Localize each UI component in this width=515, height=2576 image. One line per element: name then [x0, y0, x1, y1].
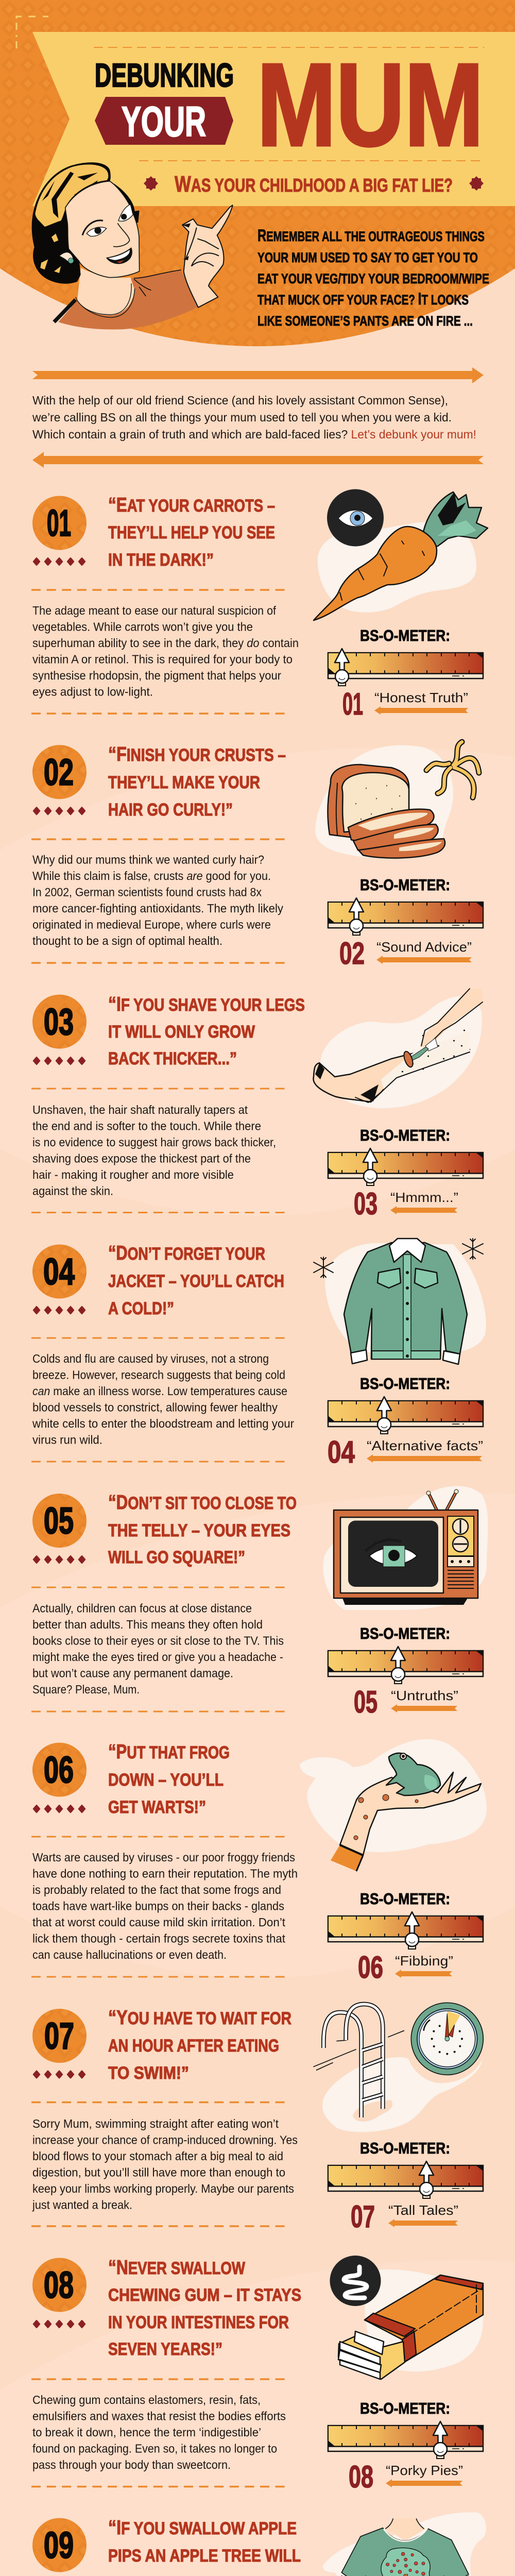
body text: hair - making it rougher and more visible — [32, 1168, 234, 1181]
rating 04: 04 — [328, 1435, 355, 1469]
number badge 07: 07 — [44, 2015, 74, 2057]
rating 07 — [351, 2199, 458, 2234]
body text: can make an illness worse. Low temperatures cause — [32, 1384, 287, 1398]
background lighter bands — [0, 748, 515, 2576]
heading: “YOU HAVE TO WAIT FOR — [108, 2007, 291, 2029]
BS meter 06 — [328, 1890, 484, 1949]
diamonds — [33, 1306, 85, 1315]
heading: HAIR GO CURLY!” — [108, 800, 233, 820]
number badge 03 — [32, 994, 87, 1049]
BS meter 06: BS-O-METER: — [360, 1890, 450, 1908]
heading: THE TELLY – YOUR EYES — [108, 1521, 290, 1540]
body text: originated in medieval Europe, where curls were — [32, 918, 271, 931]
heading: CHEWING GUM – IT STAYS — [108, 2285, 301, 2305]
number badge 03: 03 — [44, 1002, 74, 1043]
intro text: we’re calling BS on all the things your mum used to tell you when you were a kid. — [32, 411, 452, 424]
number badge 04: 04 — [43, 1251, 75, 1293]
body text: to break it down, hence the term ‘indigestible’ — [32, 2426, 261, 2439]
body text: pass through your body than sweetcorn. — [32, 2458, 231, 2471]
body text: better than adults. This means they often hold — [32, 1618, 263, 1631]
rating 05: “Untruths” — [391, 1688, 458, 1703]
heading: “FINISH YOUR CRUSTS – — [108, 743, 286, 766]
number badge 02: 02 — [44, 752, 74, 793]
body text — [31, 1089, 285, 1213]
rating 07: 07 — [351, 2199, 375, 2234]
rating 08 — [349, 2460, 463, 2494]
rating 02: 02 — [339, 936, 365, 971]
title: your plaque: YOUR — [122, 98, 206, 145]
body text: is no evidence to suggest hair grows back thicker, — [32, 1136, 276, 1149]
illustration: pool ladder and clock — [313, 2003, 483, 2132]
body text: While this claim is false, crusts are good for you. — [32, 869, 271, 883]
heading — [108, 993, 305, 1069]
heading: IT WILL ONLY GROW — [108, 1022, 255, 1042]
body text: books close to their eyes or sit close to the TV. This — [32, 1634, 284, 1648]
body text — [31, 1587, 285, 1711]
heading — [108, 1242, 284, 1318]
body text — [31, 1837, 298, 1977]
number badge 01 — [32, 496, 87, 550]
corner dashes top left — [16, 16, 48, 48]
body text: synthesise rhodopsin, the pigment that helps your — [32, 669, 281, 682]
body text: Square? Please, Mum. — [32, 1683, 140, 1696]
heading — [108, 2517, 301, 2576]
rating 01 — [342, 687, 468, 721]
rating 04: “Alternative facts” — [367, 1438, 483, 1453]
rating 02 — [339, 936, 472, 971]
rating 02: “Sound Advice” — [376, 939, 472, 955]
body text — [31, 2379, 286, 2486]
body text — [31, 839, 285, 963]
intro text: With the help of our old friend Science (and his lovely assistant Common Sense), — [32, 394, 448, 407]
heading: IN THE DARK!” — [108, 550, 214, 570]
intro heading text: THAT MUCK OFF YOUR FACE? IT LOOKS — [258, 290, 469, 308]
rating 07: “Tall Tales” — [388, 2202, 458, 2218]
diamonds — [33, 1555, 85, 1564]
heading: IN YOUR INTESTINES FOR — [108, 2313, 289, 2332]
body text: breeze. However, research suggests that being cold — [32, 1368, 285, 1382]
heading — [108, 2257, 301, 2359]
heading: SEVEN YEARS!” — [108, 2340, 222, 2359]
diamonds — [33, 807, 85, 815]
heading — [108, 2007, 291, 2083]
heading: WILL GO SQUARE!” — [108, 1548, 245, 1567]
heading: “EAT YOUR CARROTS – — [108, 494, 275, 516]
body text: vegetables. While carrots won’t give you the — [32, 620, 253, 634]
number badge 09 — [32, 2518, 87, 2572]
body text: Actually, children can focus at close distance — [32, 1601, 252, 1615]
illustration: tree on t-shirt — [323, 2512, 486, 2576]
body text — [31, 2102, 298, 2226]
heading — [108, 494, 275, 570]
illustration: retro mum — [32, 162, 233, 329]
body text: In 2002, German scientists found crusts had 8x — [32, 885, 262, 899]
body text: white cells to enter the bloodstream and letting your — [32, 1417, 294, 1430]
rating 05: 05 — [354, 1685, 377, 1719]
heading: TO SWIM!” — [108, 2063, 189, 2083]
intro heading text — [258, 226, 489, 329]
number badge 04 — [32, 1245, 87, 1298]
BS meter 05: BS-O-METER: — [360, 1624, 450, 1642]
body text: virus run wild. — [32, 1433, 102, 1447]
heading: PIPS AN APPLE TREE WILL — [108, 2546, 301, 2566]
body text: lick them though - certain frogs secrete toxins that — [32, 1932, 286, 1945]
BS meter 03 — [328, 1126, 484, 1185]
illustration: jacket and snowflakes — [314, 1239, 486, 1364]
rating 04 — [328, 1435, 483, 1469]
body text: the end and is softer to the touch. While there — [32, 1119, 261, 1132]
heading: “IF YOU SHAVE YOUR LEGS — [108, 993, 305, 1015]
illustration: bread and banana peel — [315, 742, 479, 858]
illustration: carrot and eye — [314, 489, 488, 620]
body text: Sorry Mum, swimming straight after eating won’t — [32, 2117, 279, 2130]
BS meter 08: BS-O-METER: — [360, 2399, 450, 2417]
illustration: frog on a warty hand — [300, 1739, 487, 1871]
body text: can cause hallucinations or even death. — [32, 1948, 227, 1961]
body text: thought to be a sign of optimal health. — [32, 934, 222, 947]
diamonds — [33, 1056, 85, 1065]
body text: blood vessels to constrict, allowing fewer healthy — [32, 1400, 278, 1414]
illustration: shaving a leg — [313, 989, 483, 1108]
heading: “PUT THAT FROG — [108, 1741, 230, 1763]
body text: toads have wart-like bumps on their backs - glands — [32, 1899, 284, 1912]
rating 03: 03 — [354, 1187, 377, 1221]
BS meter 03: BS-O-METER: — [360, 1126, 450, 1144]
number badge 08: 08 — [44, 2265, 74, 2306]
BS meter 05 — [328, 1624, 484, 1684]
section 04: jacket — [31, 1239, 486, 1469]
header orange background — [0, 0, 515, 346]
illustration: pack of gum and intestine — [330, 2256, 483, 2379]
BS meter 01 — [328, 626, 484, 686]
rating 08: 08 — [349, 2460, 373, 2494]
number badge 02 — [32, 745, 87, 799]
body text: against the skin. — [32, 1184, 113, 1197]
body text: digestion, but you’ll still have more than enough to — [32, 2166, 285, 2179]
body text: Colds and flu are caused by viruses, not a strong — [32, 1352, 269, 1365]
body text: more cancer-fighting antioxidants. The myth likely — [32, 902, 283, 915]
number badge 06: 06 — [44, 1750, 74, 1791]
rating 06: “Fibbing” — [395, 1953, 453, 1969]
BS meter 02 — [328, 876, 484, 935]
body text: Chewing gum contains elastomers, resin, fats, — [32, 2393, 261, 2406]
body text: is probably related to the fact that some frogs and — [32, 1883, 281, 1896]
section 08: chewing gum — [31, 2256, 484, 2494]
body text — [31, 590, 299, 714]
number badge 05: 05 — [44, 1500, 74, 1541]
body text: Unshaven, the hair shaft naturally tapers at — [32, 1103, 248, 1116]
rating 06 — [358, 1950, 453, 1985]
body text — [31, 1338, 294, 1462]
section 02: crusts — [31, 742, 484, 971]
number badge 01: 01 — [47, 503, 71, 544]
body text: Warts are caused by viruses - our poor froggy friends — [32, 1851, 295, 1864]
body text: that at worst could cause mild skin irritation. Don’t — [32, 1916, 286, 1929]
body text: have done nothing to earn their reputation. The myth — [32, 1867, 298, 1880]
section 09: apple pips — [31, 2512, 486, 2576]
section 05: telly — [31, 1486, 488, 1719]
rating 05 — [354, 1685, 458, 1719]
number badge 08 — [32, 2258, 87, 2312]
arrow banner left — [32, 452, 484, 468]
body text: might make the eyes tired or give you a headache - — [32, 1650, 283, 1664]
section 06: frog — [31, 1739, 487, 1985]
body text: Why did our mums think we wanted curly hair? — [32, 853, 264, 867]
heading: GET WARTS!” — [108, 1798, 206, 1817]
body text: found on packaging. Even so, it takes no longer to — [32, 2442, 277, 2455]
rating 03 — [354, 1187, 458, 1221]
body text: emulsifiers and waxes that resist the bodies efforts — [32, 2409, 286, 2422]
title banner — [32, 32, 515, 206]
body text: vitamin A or retinol. This is required for your body to — [32, 652, 293, 666]
section 03: shaving — [31, 989, 484, 1221]
number badge 06 — [32, 1742, 87, 1797]
rating 08: “Porky Pies” — [386, 2463, 463, 2478]
diamonds — [33, 557, 85, 566]
illustration: television with eye — [323, 1486, 488, 1610]
heading — [108, 743, 286, 820]
BS meter 07 — [328, 2139, 484, 2198]
body text: superhuman ability to see in the dark, they do contain — [32, 636, 299, 650]
title: debunking: DEBUNKING — [95, 57, 234, 94]
section 01: carrots — [31, 489, 488, 721]
body text: but won’t cause any permanent damage. — [32, 1666, 233, 1680]
body text: just wanted a break. — [32, 2198, 132, 2211]
BS meter 08 — [328, 2399, 484, 2459]
rating 01: 01 — [342, 687, 363, 721]
intro text: Which contain a grain of truth and which are bald-faced lies? Let’s debunk your mum! — [32, 428, 476, 441]
body text: The adage meant to ease our natural suspicion of — [32, 604, 277, 617]
number badge 09: 09 — [44, 2525, 74, 2566]
BS meter 01: BS-O-METER: — [360, 626, 450, 645]
heading: THEY’LL MAKE YOUR — [108, 773, 260, 792]
number badge 07 — [32, 2009, 87, 2063]
heading: AN HOUR AFTER EATING — [108, 2036, 279, 2056]
heading: THEY’LL HELP YOU SEE — [108, 523, 275, 543]
BS meter 02: BS-O-METER: — [360, 876, 450, 894]
heading: “DON’T SIT TOO CLOSE TO — [108, 1492, 297, 1514]
diamonds — [33, 1804, 85, 1814]
heading: A COLD!” — [108, 1299, 174, 1318]
rating 06: 06 — [358, 1950, 383, 1985]
heading — [108, 1492, 297, 1567]
body text: shaving does expose the thickest part of the — [32, 1152, 251, 1165]
heading: “DON’T FORGET YOUR — [108, 1242, 265, 1264]
section 07: swimming — [31, 2003, 484, 2234]
heading: JACKET – YOU’LL CATCH — [108, 1272, 284, 1291]
body text: increase your chance of cramp-induced drowning. Yes — [32, 2133, 298, 2146]
body text: keep your limbs working properly. Maybe our parents — [32, 2182, 294, 2195]
rating 03: “Hmmm...” — [390, 1190, 458, 1205]
arrow banner right — [32, 367, 484, 383]
heading: “IF YOU SWALLOW APPLE — [108, 2517, 297, 2539]
diamonds — [33, 2319, 85, 2329]
BS meter 07: BS-O-METER: — [360, 2139, 450, 2157]
number badge 05 — [32, 1494, 87, 1548]
heading: BACK THICKER...” — [108, 1049, 237, 1069]
body text: blood flows to your stomach after a big meal to aid — [32, 2149, 283, 2163]
rating 01: “Honest Truth” — [374, 690, 468, 705]
intro text — [32, 394, 476, 441]
BS meter 04: BS-O-METER: — [360, 1375, 450, 1393]
heading — [108, 1741, 230, 1817]
diamonds — [33, 2070, 85, 2079]
BS meter 04 — [328, 1375, 484, 1434]
heading: “NEVER SWALLOW — [108, 2257, 246, 2279]
heading: DOWN – YOU’LL — [108, 1770, 224, 1790]
body text: eyes adjust to low-light. — [32, 685, 153, 699]
